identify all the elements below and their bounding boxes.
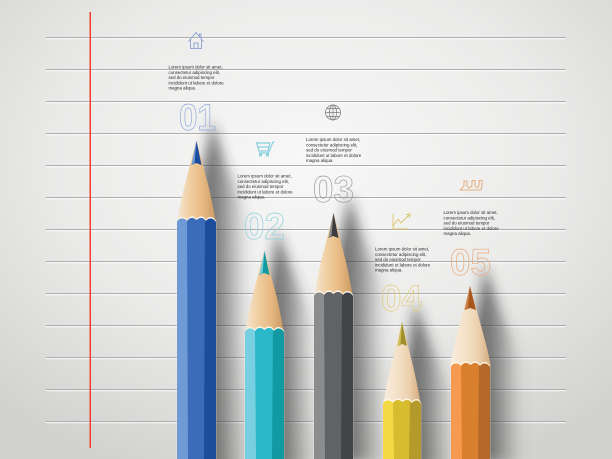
text block 2: magna aliqua. bbox=[238, 195, 265, 200]
pencil 1 shadow bbox=[201, 120, 249, 459]
pencil 5 shadow bbox=[475, 265, 523, 459]
red margin line bbox=[90, 12, 91, 448]
pencil 4 wood cone bbox=[384, 322, 420, 403]
text block 5: magna aliqua. bbox=[444, 231, 471, 236]
icon: home bbox=[188, 32, 204, 48]
text block 5: incididunt ut labore et dolore bbox=[444, 226, 499, 231]
pencil 2 teal with shadow bbox=[245, 230, 315, 459]
pencil 1 body bbox=[177, 216, 216, 459]
text block 2: Lorem ipsum dolor sit amet, bbox=[238, 174, 292, 178]
pencil 5 orange with shadow bbox=[450, 265, 523, 459]
text block 3: sed do eiusmod tempor bbox=[306, 148, 352, 153]
pencil 1 lead tip bbox=[192, 141, 202, 165]
pencil 2 lead tip bbox=[260, 251, 270, 275]
icon: globe bbox=[326, 105, 340, 120]
text block 4 bbox=[375, 246, 431, 273]
text block 2 bbox=[238, 174, 293, 200]
text block 3: consectetur adipiscing elit, bbox=[306, 142, 358, 147]
text block 3: magna aliqua. bbox=[306, 158, 334, 163]
pencil 3 lead tip bbox=[328, 213, 338, 238]
text block 1: Lorem ipsum dolor sit amet, bbox=[168, 64, 223, 70]
pencil 4 body bbox=[383, 398, 421, 459]
text block 4: sed do eiusmod tempor bbox=[375, 257, 421, 262]
text block 1: magna aliqua. bbox=[168, 86, 196, 91]
pencil 2 wood cone bbox=[246, 251, 284, 331]
pencil 2 body bbox=[245, 326, 284, 459]
pencil 1 wood cone bbox=[178, 141, 216, 221]
number 01: 01 bbox=[179, 97, 216, 138]
icon: people bbox=[460, 180, 482, 190]
pencil 5 body bbox=[451, 361, 490, 459]
pencil 3 shadow bbox=[338, 194, 386, 459]
text block 5: Lorem ipsum dolor sit amet, bbox=[444, 210, 498, 215]
text block 4: magna aliqua. bbox=[375, 268, 403, 273]
text block 2: consectetur adipiscing elit, bbox=[238, 179, 289, 184]
number 04: 04 bbox=[381, 278, 422, 319]
pencil 3 body bbox=[314, 290, 353, 459]
text block 3: incididunt ut labore et dolore bbox=[306, 153, 362, 158]
text block 1: incididunt ut labore et dolore bbox=[168, 80, 224, 85]
text block 1: consectetur adipiscing elit, bbox=[168, 70, 220, 75]
pencil 4 lead tip bbox=[398, 322, 407, 346]
text block 4: Lorem ipsum dolor sit amet, bbox=[375, 246, 429, 252]
text block 3: Lorem ipsum dolor sit amet, bbox=[306, 137, 360, 142]
text block 1 bbox=[168, 64, 224, 91]
pencil 1 blue with shadow bbox=[177, 120, 249, 459]
text block 5: consectetur adipiscing elit, bbox=[444, 215, 495, 220]
text block 1: sed do eiusmod tempor bbox=[168, 75, 215, 80]
text block 5 bbox=[444, 210, 499, 236]
text block 2: sed do eiusmod tempor bbox=[238, 184, 284, 189]
pencil 3 wood cone bbox=[314, 213, 352, 295]
ruled notebook lines bbox=[46, 38, 566, 423]
text block 5: sed do eiusmod tempor bbox=[444, 221, 490, 226]
text block 2: incididunt ut labore et dolore bbox=[238, 189, 293, 194]
number 02: 02 bbox=[244, 206, 285, 247]
pencil 2 shadow bbox=[269, 230, 315, 459]
pencil 5 wood cone bbox=[450, 286, 491, 366]
pencil 4 yellow with shadow bbox=[383, 302, 453, 459]
text block 3 bbox=[306, 137, 362, 163]
number 03: 03 bbox=[313, 169, 354, 210]
icon: line chart bbox=[393, 214, 410, 229]
pencil 5 lead tip bbox=[464, 286, 476, 310]
pencil 4 shadow bbox=[407, 302, 453, 459]
number 05: 05 bbox=[450, 242, 491, 283]
text block 4: consectetur adipiscing elit, bbox=[375, 252, 426, 257]
pencil 3 grey with shadow bbox=[314, 194, 386, 459]
text block 4: incididunt ut labore et dolore bbox=[375, 262, 431, 267]
icon: shopping cart bbox=[256, 142, 274, 156]
